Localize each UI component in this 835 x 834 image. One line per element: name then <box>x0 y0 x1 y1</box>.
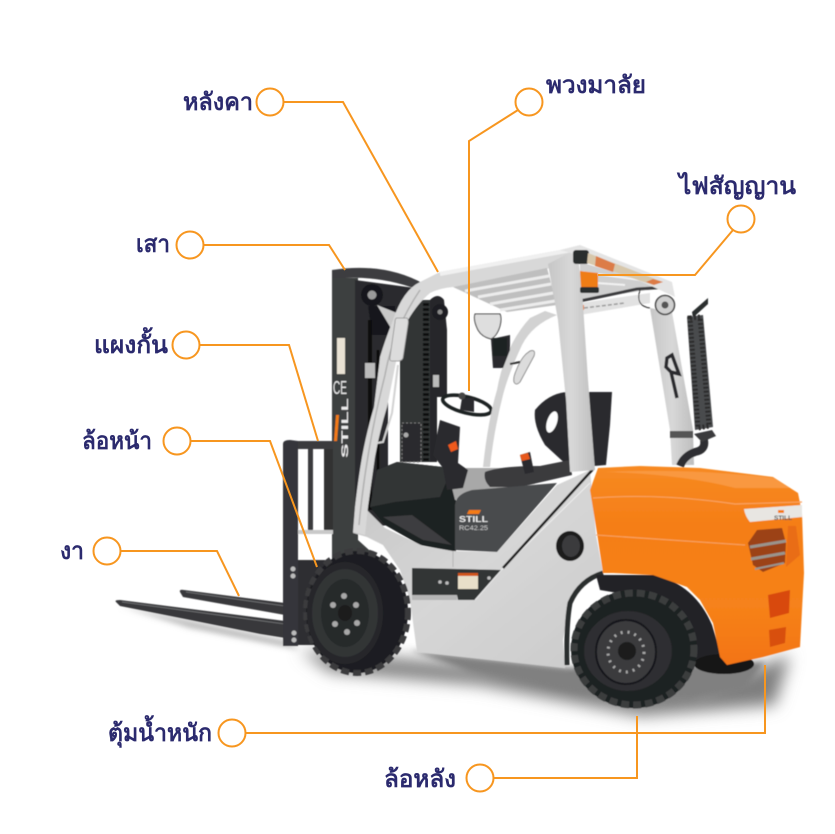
callout: ไฟสัญญาน <box>598 171 797 275</box>
callout: งา <box>60 538 239 596</box>
roof light bar <box>560 245 675 314</box>
mast STILL logo: STILL <box>340 397 350 458</box>
canopy slats <box>453 262 670 315</box>
callout: ตุ้มน้ำหนัก <box>108 665 765 749</box>
counterweight orange body <box>590 466 804 674</box>
callout: งา: งา <box>60 538 84 565</box>
steering column <box>433 420 468 490</box>
callout: พวงมาลัย: พวงมาลัย <box>546 72 646 99</box>
front roll bar <box>353 247 582 535</box>
front wheel <box>306 551 408 673</box>
mast <box>332 268 448 575</box>
callout: หลังคา <box>183 88 438 272</box>
rear right pillar <box>650 308 694 465</box>
callout: เสา: เสา <box>136 231 170 258</box>
rear wheel <box>571 590 697 708</box>
seat <box>485 392 612 487</box>
rear badge <box>744 505 802 522</box>
body panel <box>353 468 603 668</box>
warning sticker <box>458 573 478 589</box>
side mirror right <box>510 351 534 384</box>
callout: แผงกั้น <box>94 326 318 441</box>
forklift illustration <box>116 245 804 716</box>
steering wheel <box>441 391 493 419</box>
callout: ไฟสัญญาน: ไฟสัญญาน <box>676 171 797 200</box>
forks <box>116 590 285 638</box>
console panel <box>455 483 557 552</box>
callout: แผงกั้น: แผงกั้น <box>94 326 169 359</box>
callout: หลังคา: หลังคา <box>183 89 253 116</box>
mast warning label <box>337 338 345 374</box>
main cab pillar <box>548 249 595 472</box>
grab handle <box>377 365 398 443</box>
callout: ล้อหน้า <box>82 428 317 567</box>
callout: พวงมาลัย <box>469 72 646 391</box>
rear view mirror <box>474 314 510 368</box>
orange beacon <box>580 271 599 293</box>
rear cab arch <box>483 311 557 467</box>
CE mark: CE <box>333 378 347 398</box>
fork carriage <box>283 440 333 646</box>
callout: ตุ้มน้ำหนัก: ตุ้มน้ำหนัก <box>108 714 212 749</box>
callout: ล้อหลัง: ล้อหลัง <box>384 766 456 793</box>
callout: ล้อหลัง <box>384 716 637 793</box>
rear STILL logo: STILL <box>774 515 792 522</box>
side mirror left <box>390 318 408 361</box>
radiator grille <box>748 526 800 572</box>
work lamp <box>656 296 674 314</box>
ground shadow <box>120 606 790 716</box>
cab interior <box>370 462 535 552</box>
console model number: RC42.25 <box>459 525 488 532</box>
exhaust pipe <box>680 298 716 466</box>
tow slots <box>768 590 790 647</box>
callout: เสา <box>136 231 345 270</box>
callout: ล้อหน้า: ล้อหน้า <box>82 428 152 455</box>
console STILL logo: STILL <box>459 514 488 524</box>
